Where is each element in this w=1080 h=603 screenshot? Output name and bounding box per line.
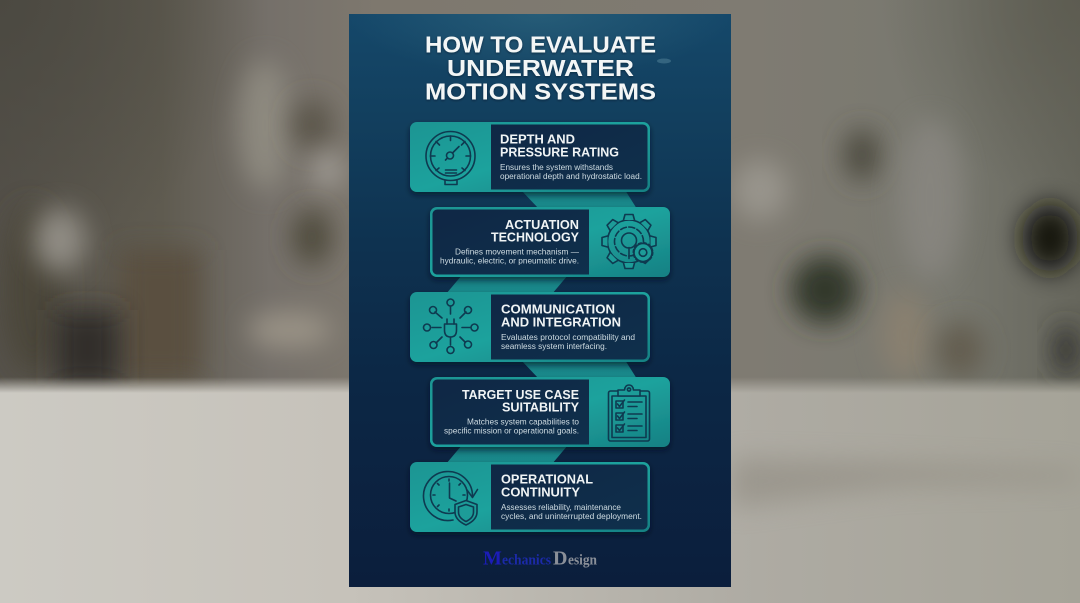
description: cycles, and uninterrupted deployment. [501,511,642,521]
icon: clock with shield [424,472,478,525]
description: Evaluates protocol compatibility and [501,332,635,342]
heading [462,388,580,415]
description [444,416,579,435]
icon: gears [602,214,656,268]
heading: COMMUNICATION [501,302,615,316]
card 1: depth and pressure rating [410,122,650,192]
title [425,32,656,104]
title: UNDERWATER [447,55,634,81]
card 3: communication and integration [410,292,650,362]
description [501,332,635,351]
logo: Mechanics Design: echanics [502,552,551,568]
icon: plug network [424,299,478,354]
heading [491,218,580,245]
icon: pressure gauge [426,132,475,184]
description: seamless system interfacing. [501,341,607,351]
description [440,246,579,265]
card 2: actuation technology [430,207,670,277]
description: specific mission or operational goals. [444,425,579,435]
logo: Mechanics Design: esign [568,552,597,568]
description: operational depth and hydrostatic load. [500,171,642,181]
logo: Mechanics Design [483,548,597,570]
bubble speck [657,58,671,64]
title: HOW TO EVALUATE [425,32,656,58]
connectors between cards [446,190,637,464]
heading: ACTUATION [505,218,579,232]
description [500,162,642,181]
heading [500,132,619,160]
description [501,502,642,521]
heading: PRESSURE RATING [500,146,619,160]
heading [501,302,621,330]
title: MOTION SYSTEMS [425,78,656,104]
description: Defines movement mechanism — [455,246,579,256]
poster panel [349,14,731,587]
description: Assesses reliability, maintenance [501,502,621,512]
card 5: operational continuity [410,462,650,532]
heading: AND INTEGRATION [501,316,621,330]
poster glow [349,14,731,144]
heading: CONTINUITY [501,486,581,500]
heading: OPERATIONAL [501,472,593,486]
heading: SUITABILITY [502,401,580,415]
logo: Mechanics Design: M [483,548,502,570]
heading: TARGET USE CASE [462,388,579,402]
heading: DEPTH AND [500,132,575,146]
logo: Mechanics Design: D [553,548,567,570]
heading: TECHNOLOGY [491,231,580,245]
description: Matches system capabilities to [467,416,579,426]
icon: clipboard checklist [608,385,650,441]
poster [349,14,731,587]
card 4: target use case suitability [430,377,670,447]
description: Ensures the system withstands [500,162,613,172]
description: hydraulic, electric, or pneumatic drive. [440,255,579,265]
heading [501,472,593,500]
